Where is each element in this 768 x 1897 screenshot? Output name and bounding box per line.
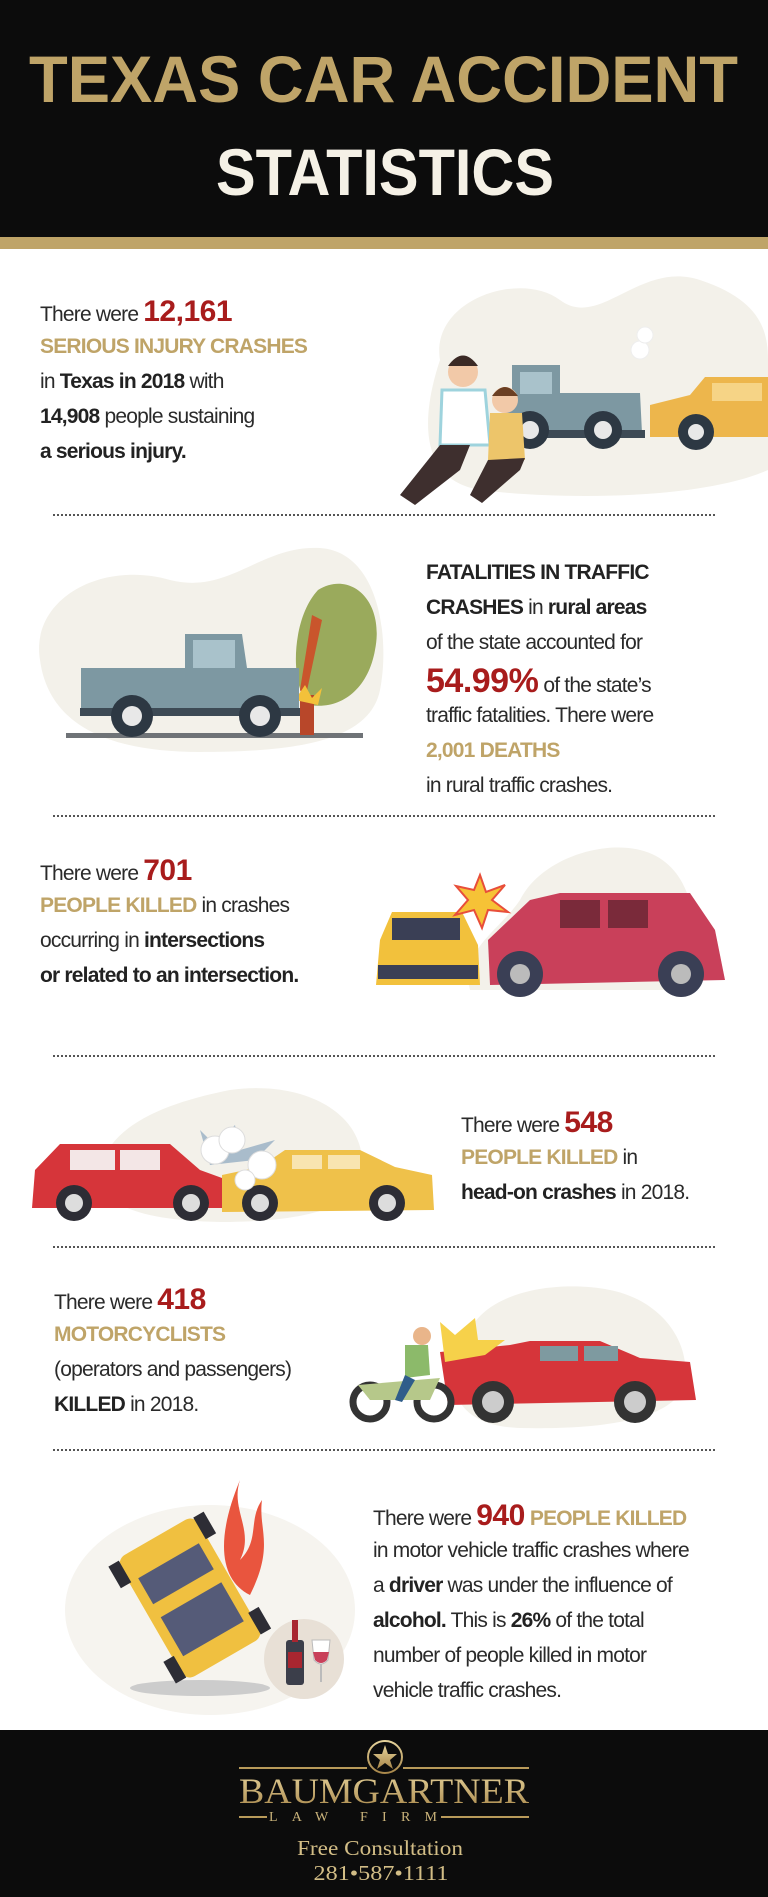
smoke — [631, 341, 649, 359]
footer logo and contact: LAW FIRM — [269, 1810, 438, 1825]
title — [29, 42, 738, 209]
text block: motorcyclists: MOTORCYCLISTS — [54, 1323, 225, 1346]
header band — [0, 0, 768, 249]
text block: alcohol: vehicle traffic crashes. — [373, 1679, 561, 1702]
text block: intersections: There were 701 — [40, 854, 192, 887]
text block: rural fatalities: traffic fatalities. There were — [426, 704, 653, 727]
people — [448, 357, 478, 387]
text block: rural fatalities: CRASHES in rural areas — [426, 596, 647, 619]
footer logo and contact: 281•587•1111 — [314, 1861, 448, 1885]
text block: rural fatalities — [426, 561, 654, 797]
illustration: pickup hits tree — [39, 548, 383, 752]
text block: intersections: PEOPLE KILLED in crashes — [40, 894, 289, 917]
text block: motorcyclists: (operators and passengers) — [54, 1358, 291, 1381]
text block: alcohol — [373, 1499, 689, 1702]
footer band — [0, 1730, 768, 1897]
text block: serious injury crashes: in Texas in 2018 with — [40, 370, 224, 393]
illustration: roadside injury — [400, 276, 768, 505]
text block: serious injury crashes — [40, 295, 308, 463]
icon: star emblem — [368, 1741, 402, 1773]
text block: serious injury crashes: 14,908 people sustaining — [40, 405, 254, 428]
text block: head-on crashes: PEOPLE KILLED in — [461, 1146, 637, 1169]
text block: motorcyclists: There were 418 — [54, 1283, 206, 1316]
text block: intersections: or related to an intersection. — [40, 964, 298, 987]
illustration: intersection crash — [376, 847, 725, 997]
text block: rural fatalities: FATALITIES IN TRAFFIC — [426, 561, 649, 584]
text block: motorcyclists — [54, 1283, 291, 1416]
contact text: Free Consultation — [297, 1836, 464, 1860]
text block: intersections: occurring in intersections — [40, 929, 264, 952]
text block: serious injury crashes: a serious injury. — [40, 440, 186, 463]
logo text: BAUMGARTNER — [239, 1771, 529, 1811]
text block: serious injury crashes: There were 12,161 — [40, 295, 232, 328]
text block: rural fatalities: 54.99% of the state’s — [426, 662, 651, 700]
text block: head-on crashes: There were 548 — [461, 1106, 613, 1139]
text block: alcohol: alcohol. This is 26% of the total — [373, 1609, 644, 1632]
text block: head-on crashes — [461, 1106, 689, 1204]
text block: motorcyclists: KILLED in 2018. — [54, 1393, 198, 1416]
text block: intersections — [40, 854, 298, 987]
yellow car — [650, 377, 768, 437]
title: STATISTICS — [216, 135, 554, 209]
text block: alcohol: in motor vehicle traffic crashes where — [373, 1539, 689, 1562]
text block: rural fatalities: 2,001 DEATHS — [426, 739, 560, 762]
title: TEXAS CAR ACCIDENT — [29, 42, 738, 116]
illustration: flipped car with alcohol — [65, 1480, 355, 1715]
text block: alcohol: There were 940 PEOPLE KILLED — [373, 1499, 686, 1532]
text block: rural fatalities: in rural traffic crashes. — [426, 774, 612, 797]
text block: alcohol: number of people killed in motor — [373, 1644, 646, 1667]
text block: rural fatalities: of the state accounted for — [426, 631, 642, 654]
text block: head-on crashes: head-on crashes in 2018. — [461, 1181, 689, 1204]
illustration: motorcycle crash — [353, 1286, 696, 1428]
footer logo and contact — [239, 1740, 529, 1885]
text block: alcohol: a driver was under the influence of — [373, 1574, 672, 1597]
pickup — [505, 365, 642, 433]
illustration: head-on crash — [32, 1088, 434, 1222]
text block: serious injury crashes: SERIOUS INJURY CRASHES — [40, 335, 307, 358]
